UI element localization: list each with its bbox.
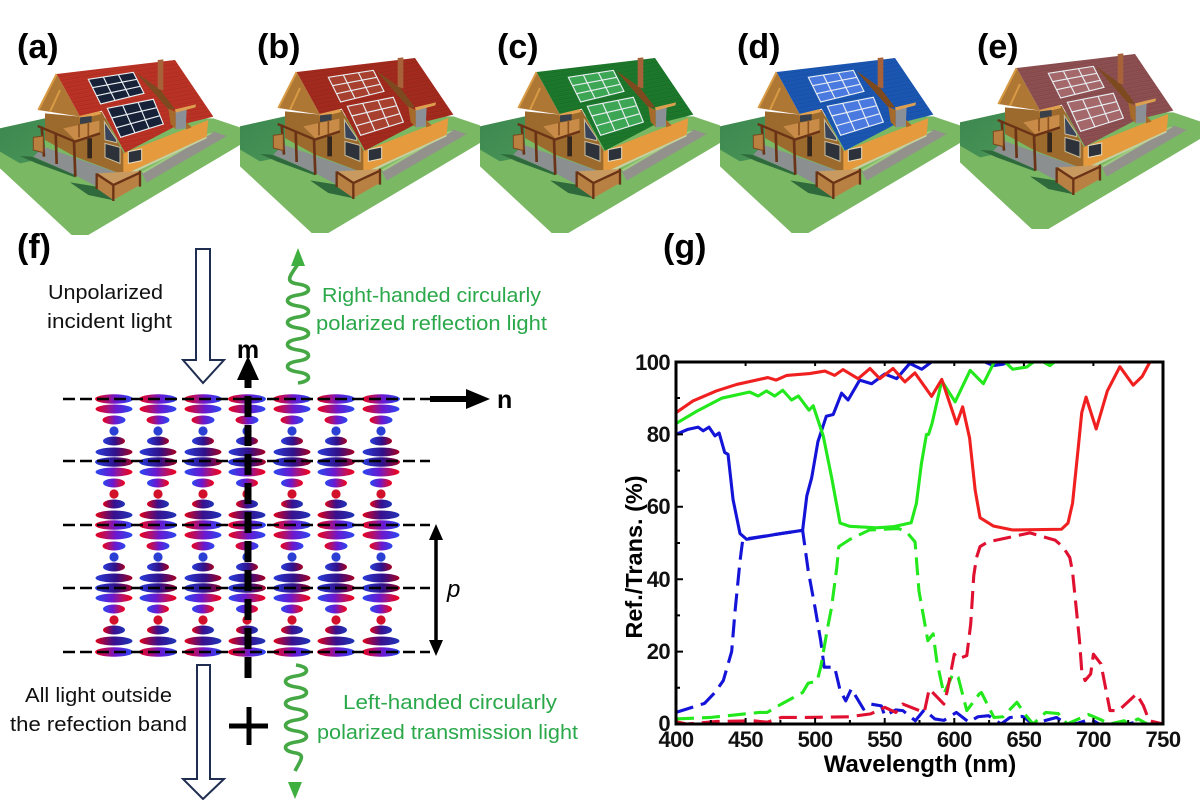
text: unpolarized incident light: Unpolarized [48, 282, 163, 304]
label (b): (b) [257, 28, 300, 66]
y axis title: Ref./Trans. (%) [621, 475, 647, 639]
chart g: reflectance and transmittance spectra [621, 350, 1181, 778]
label (a): (a) [17, 28, 59, 66]
x tick labels: 400 [659, 727, 694, 752]
label (c): (c) [497, 28, 539, 66]
x tick labels: 600 [937, 727, 972, 752]
house (c): green panels [480, 57, 720, 233]
y tick labels: 80 [647, 422, 670, 447]
x tick labels: 450 [728, 727, 763, 752]
x tick labels: 500 [798, 727, 833, 752]
solid and dashed curves [678, 364, 1162, 722]
x tick labels: 650 [1006, 727, 1042, 752]
text: unpolarized incident light: incident light [47, 311, 172, 333]
y tick labels [635, 350, 670, 736]
text: unpolarized incident light [47, 282, 172, 333]
text: right-handed reflection [316, 285, 547, 335]
y tick labels: 20 [647, 639, 670, 664]
arrow: transmitted light [183, 665, 224, 799]
label m: m [237, 336, 259, 364]
x tick labels [659, 727, 1181, 752]
wavy arrow: transmitted light [286, 665, 306, 799]
plus sign [229, 707, 268, 745]
arrow: pitch p [429, 524, 443, 656]
label p: p [446, 576, 460, 603]
house (b): red panels [240, 57, 480, 233]
text: right-handed reflection: polarized reflection light [316, 313, 547, 335]
axes frame and ticks [676, 362, 1163, 724]
label (g): (g) [663, 228, 706, 266]
label (e): (e) [977, 28, 1019, 66]
text: all light outside the reflection band: All light outside [25, 685, 172, 707]
arrow: n axis [430, 389, 490, 409]
text: left-handed transmission: polarized transmission light [317, 722, 578, 744]
house (a): dark solar panels on red roof [0, 59, 240, 235]
x tick labels: 550 [867, 727, 903, 752]
x axis title: Wavelength (nm) [824, 751, 1016, 778]
text: left-handed transmission: Left-handed circularly [343, 692, 557, 714]
text: right-handed reflection: Right-handed circularly [322, 285, 541, 307]
label n: n [497, 386, 512, 414]
x tick labels: 700 [1076, 727, 1111, 752]
house (e): mauve panels [960, 53, 1200, 229]
wavy arrow: reflected light [288, 248, 308, 383]
y tick labels: 0 [658, 711, 670, 736]
text: left-handed transmission [317, 692, 578, 744]
y tick labels: 60 [647, 494, 670, 519]
arrow: incident light [183, 249, 224, 383]
x tick labels: 750 [1146, 727, 1181, 752]
text: all light outside the reflection band: the refection band [10, 714, 187, 736]
y tick labels: 100 [635, 350, 670, 375]
panel f: liquid crystal helix layers [63, 394, 430, 657]
y tick labels: 40 [647, 567, 670, 592]
arrow: m axis [237, 356, 259, 678]
text: all light outside the reflection band [10, 685, 187, 736]
label (f): (f) [17, 228, 51, 266]
house (d): blue panels [720, 57, 960, 233]
label (d): (d) [737, 28, 780, 66]
